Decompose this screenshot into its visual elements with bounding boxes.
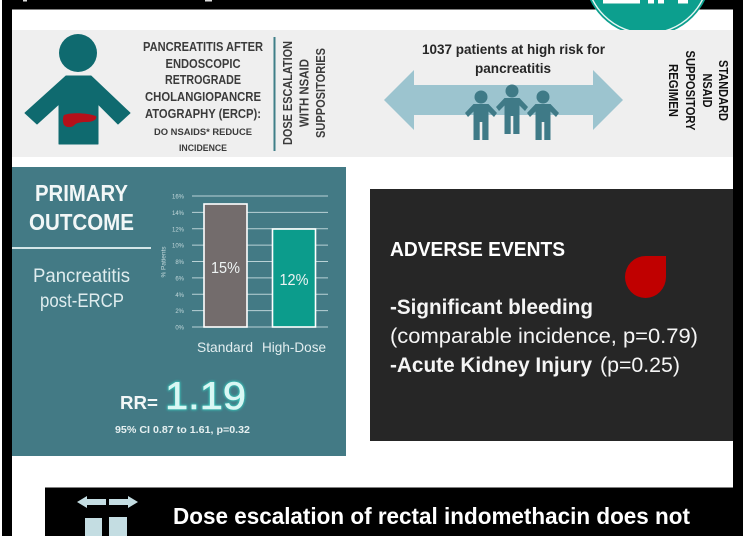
text: study question: PANCREATITIS AFTER xyxy=(143,40,263,54)
text: outcome name: post-ERCP xyxy=(40,290,124,312)
text: patients count xyxy=(422,42,606,76)
text: study question: INCIDENCE xyxy=(179,143,227,154)
icon: dose arrows and columns xyxy=(77,496,138,536)
panel: adverse events xyxy=(370,189,733,441)
text: intervention arm label: WITH NSAID xyxy=(298,59,312,127)
text: control arm label: STANDARD xyxy=(716,60,730,121)
text: outcome name xyxy=(33,265,130,312)
bar chart: 10% xyxy=(172,244,185,250)
bar chart: 2% xyxy=(175,309,185,315)
panel: study overview band xyxy=(12,30,733,157)
heading: primary outcome: OUTCOME xyxy=(29,209,134,235)
text: outcome name: Pancreatitis xyxy=(33,265,130,287)
panel: conclusion xyxy=(45,488,733,536)
text: study question: RETROGRADE xyxy=(165,73,241,87)
statistic: relative risk: 1.19 xyxy=(165,375,246,418)
text: control arm label: SUPPOSITORY xyxy=(683,50,697,131)
bar chart: Standard xyxy=(197,339,253,355)
icon: patient with pancreas xyxy=(25,34,130,144)
text: adverse event list: -Acute Kidney Injury xyxy=(390,354,592,377)
text: control arm label: NSAID xyxy=(700,74,714,108)
text: adverse event list: -Significant bleeding xyxy=(390,296,593,319)
statistic: relative risk: 1.19 xyxy=(165,375,246,418)
text: study question xyxy=(143,40,263,154)
text: study question: ENDOSCOPIC xyxy=(166,57,240,71)
panel: primary outcome xyxy=(12,167,346,456)
bar chart: 4% xyxy=(175,293,185,299)
text: adverse event list: (p=0.25) xyxy=(600,354,680,377)
bar chart xyxy=(160,194,328,355)
statistic: relative risk: RR= xyxy=(120,392,158,413)
statistic: relative risk xyxy=(115,375,250,436)
text: control arm label xyxy=(666,50,730,131)
bar chart: 12% xyxy=(280,272,308,289)
heading: adverse events: ADVERSE EVENTS xyxy=(390,239,565,261)
text: conclusion: Dose escalation of rectal indomethacin does not xyxy=(173,503,690,529)
bar chart: 0% xyxy=(175,326,185,332)
logo badge xyxy=(584,0,712,36)
text: intervention arm label xyxy=(281,41,328,145)
text: intervention arm label: SUPPOSITORIES xyxy=(314,48,328,138)
bar chart: 15% xyxy=(211,260,240,277)
icon: three patients xyxy=(465,84,559,140)
bar chart: 6% xyxy=(175,276,185,282)
arrow: two-way randomisation xyxy=(384,70,623,130)
text: study question: CHOLANGIOPANCRE xyxy=(145,90,261,104)
bar chart: High-Dose xyxy=(262,339,326,355)
bar chart: 12% xyxy=(172,227,185,233)
bar chart: 8% xyxy=(175,260,185,266)
text: adverse event list xyxy=(390,296,698,377)
text: adverse event list: (comparable incidence, p=0.79) xyxy=(390,325,698,348)
heading: primary outcome: PRIMARY xyxy=(35,180,128,206)
bar chart: 14% xyxy=(172,211,185,217)
statistic: relative risk: 95% CI 0.87 to 1.61, p=0.32 xyxy=(115,424,250,436)
icon: blood drop xyxy=(625,256,666,298)
text: patients count: pancreatitis xyxy=(475,61,551,76)
bar chart: 16% xyxy=(172,194,185,200)
text: study question: ATOGRAPHY (ERCP): xyxy=(145,107,261,121)
text: control arm label: REGIMEN xyxy=(666,64,680,117)
text: intervention arm label: DOSE ESCALATION xyxy=(281,41,295,145)
heading: primary outcome xyxy=(29,180,134,235)
text: study question: DO NSAIDS* REDUCE xyxy=(154,127,252,138)
text: patients count: 1037 patients at high risk for xyxy=(422,42,606,57)
bar chart: % Patients xyxy=(160,246,168,278)
